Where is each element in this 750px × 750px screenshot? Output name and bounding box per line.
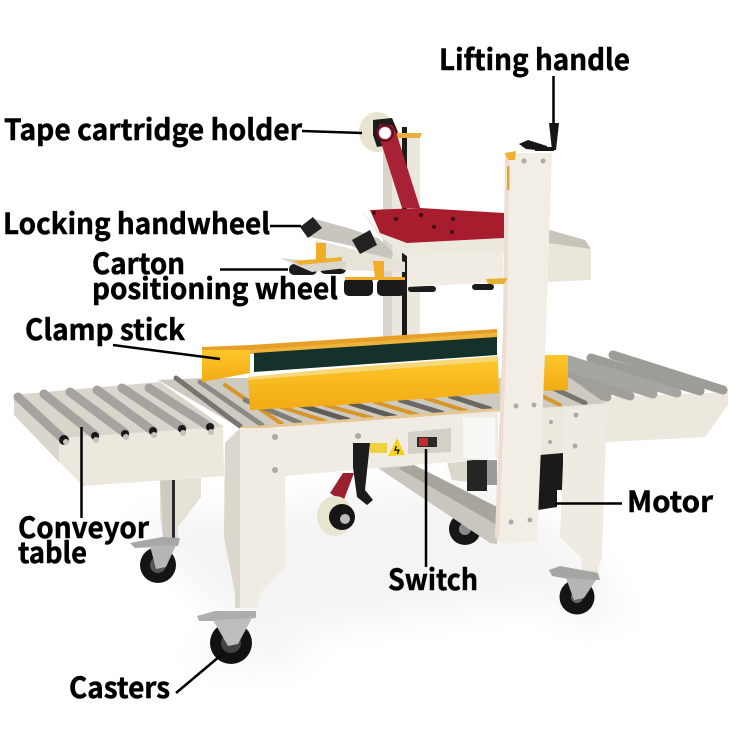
- label: carton positioning wheel: Carton: [92, 241, 185, 283]
- right conveyor table: [568, 355, 728, 442]
- front-left caster: [197, 611, 256, 664]
- label: casters: [69, 656, 220, 707]
- label: conveyor table: table: [18, 530, 87, 572]
- label: conveyor table: Conveyor: [18, 505, 149, 547]
- shelf and front beam: [360, 209, 508, 287]
- rear left pad wheels: [289, 264, 494, 292]
- front apron: [240, 408, 498, 476]
- label: carton positioning wheel: [92, 241, 338, 308]
- rollers: [18, 388, 210, 438]
- label: tape cartridge holder: Tape cartridge holder: [4, 107, 302, 149]
- rear caster under body: [449, 513, 481, 545]
- tape cartridge holder: [359, 112, 420, 208]
- label: casters: Casters: [69, 665, 170, 707]
- rear-left leg: [160, 478, 201, 538]
- red plate: [370, 208, 504, 243]
- front mast: [495, 151, 552, 544]
- label: motor: Motor: [627, 479, 713, 521]
- front clamp stick: [248, 356, 499, 410]
- label: lifting handle: Lifting handle: [439, 37, 630, 79]
- label: clamp stick: [25, 307, 220, 359]
- lifting handle: [519, 123, 559, 151]
- right caster: [549, 566, 600, 614]
- under body parts: [447, 460, 497, 491]
- switch panel: [408, 428, 451, 454]
- rear mast: [383, 127, 422, 345]
- carton positioning wheels: [280, 257, 405, 296]
- rear shelf: [546, 229, 591, 282]
- label: switch: Switch: [388, 557, 478, 599]
- warning labels: ϟ: [394, 442, 400, 458]
- front-left leg: [224, 428, 361, 608]
- centre conveyor rollers: [158, 378, 608, 428]
- white wiring label: [463, 418, 495, 458]
- motor: [538, 453, 563, 510]
- right clamp end: [543, 355, 568, 391]
- right apron and leg: [538, 403, 610, 570]
- warning labels: [370, 438, 405, 458]
- machine illustration: [13, 112, 728, 664]
- locking handwheel assemblies: [300, 217, 405, 278]
- label: locking handwheel: Locking handwheel: [3, 201, 270, 243]
- lower tape roller: [317, 473, 355, 536]
- left conveyor table: [13, 382, 224, 486]
- rollers: [568, 355, 723, 397]
- label: conveyor table: [18, 427, 149, 572]
- rear clamp stick: [202, 329, 497, 382]
- rear-left caster: [130, 537, 180, 583]
- floor shadow: [130, 480, 630, 667]
- label: clamp stick: Clamp stick: [25, 307, 185, 349]
- diagonal strut: [378, 465, 497, 544]
- label: carton positioning wheel: positioning wheel: [92, 266, 338, 308]
- lower handle: [353, 443, 373, 505]
